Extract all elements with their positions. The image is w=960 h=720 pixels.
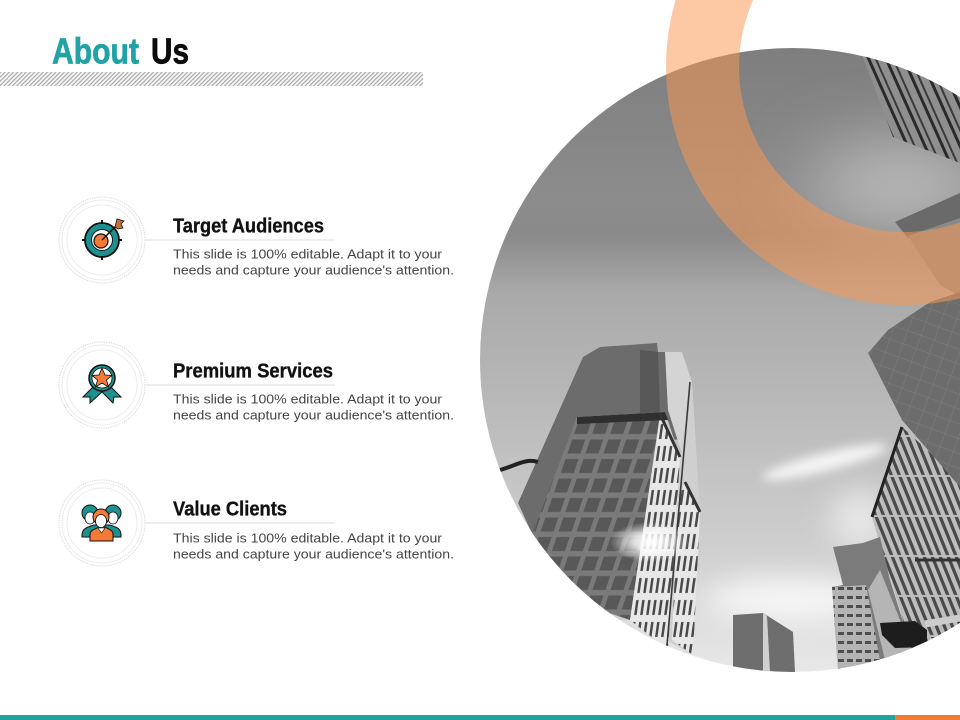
- body text: premium services: [173, 392, 454, 422]
- photo circle: skyscrapers: [480, 40, 960, 672]
- body text: value clients: needs and capture your audience's attention.: [173, 546, 454, 562]
- heading: premium services: Premium Services: [173, 360, 333, 382]
- item: premium services: [59, 342, 454, 428]
- body text: target audiences: This slide is 100% editable. Adapt it to your: [173, 246, 443, 262]
- item: value clients: [59, 480, 454, 566]
- icon: people in rings: [59, 480, 145, 566]
- footer bar: [0, 715, 960, 720]
- decorative orange ring: [666, 0, 960, 305]
- body text: premium services: needs and capture your audience's attention.: [173, 408, 454, 422]
- body text: target audiences: needs and capture your audience's attention.: [173, 262, 454, 278]
- body text: target audiences: [173, 246, 454, 278]
- title: Us: [151, 30, 189, 72]
- body text: premium services: This slide is 100% editable. Adapt it to your: [173, 392, 443, 406]
- heading: target audiences: Target Audiences: [173, 216, 324, 238]
- body text: value clients: This slide is 100% editable. Adapt it to your: [173, 530, 443, 546]
- heading: value clients: Value Clients: [173, 498, 287, 520]
- icon: target in rings: [59, 197, 145, 283]
- hatched title band: [0, 72, 423, 86]
- body text: value clients: [173, 530, 454, 562]
- title: About: [52, 30, 139, 72]
- icon: award ribbon in rings: [59, 342, 145, 428]
- item: target audiences: [59, 197, 454, 283]
